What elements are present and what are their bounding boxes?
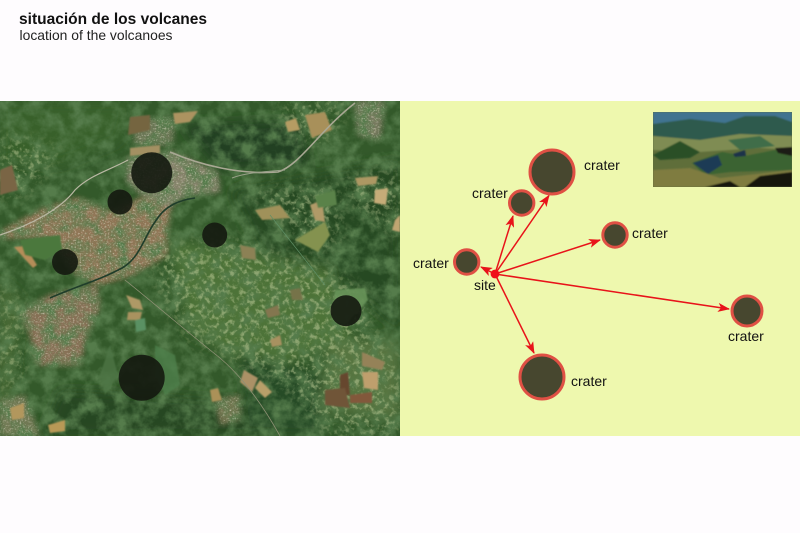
crater 1 — [131, 152, 172, 193]
crater nodes — [454, 150, 762, 399]
label: crater far right: crater — [728, 328, 764, 344]
crater node: bottom — [520, 355, 564, 399]
label: site: site — [474, 277, 496, 293]
fields — [0, 111, 400, 433]
arrow to top crater — [495, 196, 549, 274]
crater overlays on map — [52, 152, 362, 401]
photo: aerial view of volcanoes — [653, 112, 792, 187]
diagram labels — [413, 157, 764, 389]
crater node: upper left — [510, 191, 534, 215]
arrow to bottom crater — [495, 274, 534, 353]
crater 3 — [202, 222, 227, 248]
subtitle: English title: location of the volcanoes — [20, 27, 172, 43]
crater node: top — [530, 150, 574, 194]
label: crater left: crater — [413, 255, 449, 271]
crater 6 — [119, 355, 165, 401]
crater node: left — [454, 250, 479, 274]
label: crater bottom: crater — [571, 373, 607, 389]
crater node: right — [603, 223, 627, 247]
crater 2 — [108, 190, 132, 214]
title — [19, 11, 207, 43]
texture — [0, 101, 400, 436]
label: crater right: crater — [632, 225, 668, 241]
panel: aerial map — [0, 101, 400, 436]
label: crater upper left: crater — [472, 185, 508, 201]
roads and river — [0, 103, 355, 436]
crater 4 — [52, 249, 78, 275]
arrow to far-right crater — [495, 274, 729, 309]
crater 5 — [330, 295, 362, 326]
arrow to upper-left crater — [495, 216, 513, 274]
connector arrows — [481, 196, 729, 353]
panel: schematic diagram — [400, 101, 800, 436]
label: crater top: crater — [584, 157, 620, 173]
site marker — [491, 270, 499, 278]
heading: Spanish title: situación de los volcanes — [19, 11, 207, 28]
arrow to right crater — [495, 240, 600, 274]
crater node: far right — [732, 296, 762, 326]
arrow to left crater — [481, 267, 495, 274]
